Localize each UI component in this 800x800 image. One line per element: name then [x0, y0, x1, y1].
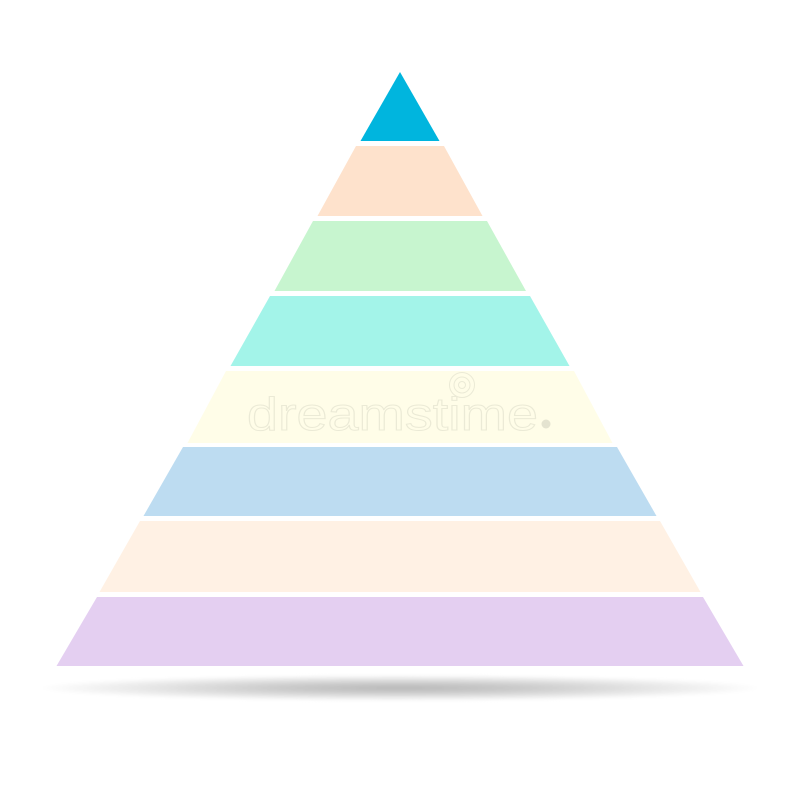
ground shadow	[38, 675, 762, 701]
pyramid layer 5: pale yellow	[188, 371, 612, 443]
watermark	[247, 372, 550, 440]
watermark wordmark: dreamstime	[247, 388, 538, 440]
watermark dot	[542, 420, 550, 428]
pyramid layer 2: peach	[318, 146, 482, 216]
pyramid layer 6: light blue	[144, 447, 656, 516]
watermark spiral icon	[450, 372, 474, 398]
pyramid layer 4: teal	[230, 296, 570, 366]
pyramid layer 7: cream	[100, 521, 700, 592]
pyramid layer 8: lavender	[56, 597, 744, 666]
pyramid layer 3: green	[274, 221, 526, 291]
pyramid layer 1: blue apex	[360, 72, 440, 141]
